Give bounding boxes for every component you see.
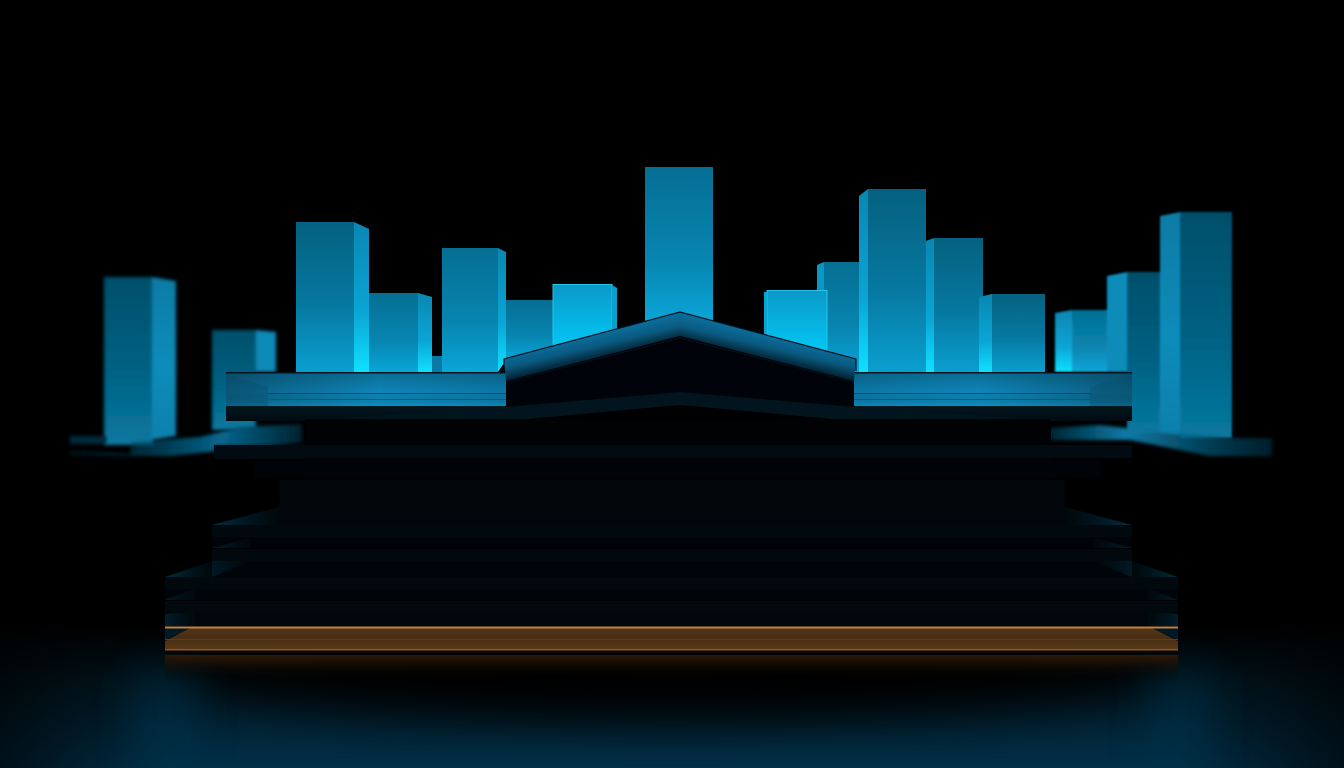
far left blurred ledges [70, 424, 305, 459]
reflective floor [0, 616, 1344, 768]
bar: left 1 [296, 222, 369, 372]
platform: right wing [854, 372, 1132, 421]
tier: dark block [279, 480, 1065, 525]
platform: left wing [226, 372, 506, 421]
bar: right back [817, 262, 859, 372]
bar: right short [979, 294, 1045, 372]
bar group: left [296, 222, 617, 372]
bar: left bright [553, 284, 617, 346]
tier: upper ledges [214, 445, 1132, 478]
bar: right medium [926, 238, 983, 372]
far left blurred bars [104, 277, 276, 445]
tier: lower wings [165, 561, 1178, 627]
bar: centre tall [645, 167, 713, 322]
bar: right tall [859, 189, 926, 372]
tier: middle wings [212, 507, 1132, 577]
far right blurred ledges [1048, 425, 1272, 456]
bar: right bright [764, 290, 827, 350]
bar group: right [764, 189, 1045, 372]
pediment roof [300, 312, 1060, 421]
layered stack [165, 419, 1178, 627]
bar: left 4 [506, 300, 553, 360]
tier: upper body [305, 419, 1051, 480]
far right blurred bars [1055, 212, 1232, 438]
bar: left 2 [369, 293, 432, 372]
amber base slab [165, 626, 1178, 681]
bar: left 3 [432, 248, 506, 372]
